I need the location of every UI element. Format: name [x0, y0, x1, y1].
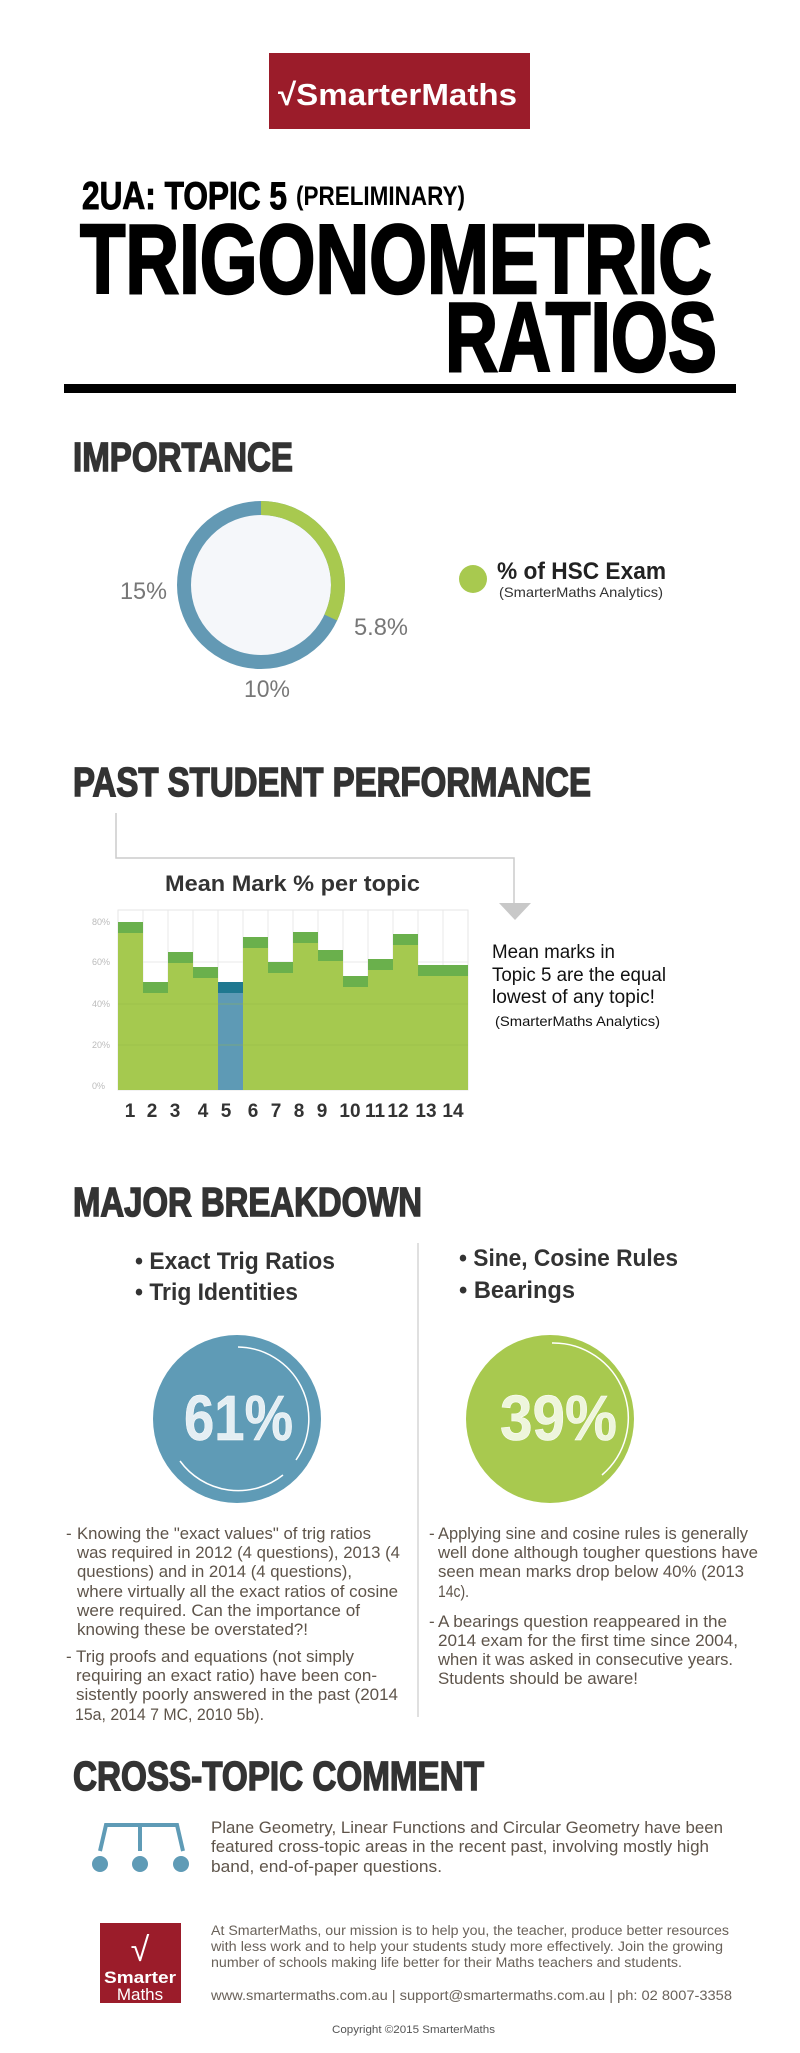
circle: 61%	[153, 1335, 321, 1503]
subtitle: topic: 2UA: TOPIC 5	[82, 175, 287, 218]
text block: right breakdown: A bearings question reappeared in the	[438, 1612, 727, 1631]
bar chart: 8	[294, 1101, 304, 1122]
legend: % of HSC Exam	[497, 558, 666, 585]
bullets: left: • Trig Identities	[135, 1279, 298, 1306]
bar chart: 9	[317, 1101, 327, 1122]
footer logo	[100, 1923, 181, 2004]
bar chart: 5	[221, 1101, 232, 1122]
bar chart: 12	[387, 1101, 409, 1122]
footer text	[210, 1923, 732, 2003]
bar chart: 7	[271, 1101, 281, 1122]
copyright: Copyright ©2015 SmarterMaths	[332, 2024, 496, 2036]
donut chart: 10%	[244, 676, 290, 703]
icon: hierarchy	[92, 1825, 189, 1872]
text block: right breakdown: well done although tougher questions have	[437, 1543, 758, 1562]
footer logo: √	[131, 1931, 150, 1969]
footer text: with less work and to help your students study more effectively. Join the growing	[210, 1939, 723, 1954]
heading: past student performance: PAST STUDENT PERFORMANCE	[73, 759, 591, 805]
chart title: Mean Mark % per topic	[165, 871, 420, 896]
text block: right breakdown: -	[429, 1612, 435, 1631]
bar chart: 10	[339, 1101, 361, 1122]
logo	[269, 53, 530, 129]
footer text: www.smartermaths.com.au | support@smartermaths.com.au | ph: 02 8007-3358	[210, 1988, 732, 2003]
chart callout text: Topic 5 are the equal	[492, 965, 666, 986]
text block: right breakdown: Students should be aware!	[438, 1669, 638, 1688]
chart callout text: lowest of any topic!	[492, 987, 655, 1008]
text block: cross-topic: featured cross-topic areas in the recent past, involving mostly high	[211, 1837, 709, 1856]
donut chart	[120, 508, 408, 703]
text block: right breakdown: seen mean marks drop below 40% (2013	[438, 1562, 744, 1581]
text block: cross-topic	[211, 1818, 723, 1876]
text block: right breakdown: 2014 exam for the first time since 2004,	[438, 1631, 738, 1650]
bar chart: 14	[442, 1101, 464, 1122]
text block: right breakdown	[429, 1524, 758, 1688]
bar chart: 2	[147, 1101, 157, 1122]
footer text: At SmarterMaths, our mission is to help you, the teacher, produce better resources	[211, 1923, 729, 1938]
donut chart: 15%	[120, 578, 167, 605]
heading: cross-topic comment: CROSS-TOPIC COMMENT	[73, 1753, 484, 1799]
title: RATIOS	[445, 282, 717, 392]
text block: right breakdown: when it was asked in consecutive years.	[437, 1650, 733, 1669]
bullets: right: • Bearings	[459, 1277, 575, 1304]
bullets: left: • Exact Trig Ratios	[135, 1248, 335, 1275]
legend	[459, 558, 666, 600]
text block: right breakdown: Applying sine and cosine rules is generally	[438, 1524, 748, 1543]
heading: major breakdown: MAJOR BREAKDOWN	[73, 1179, 422, 1225]
text block: left breakdown: -	[66, 1524, 72, 1543]
text block: left breakdown: -	[66, 1647, 72, 1666]
footer text: number of schools making life better for their Maths teachers and students.	[211, 1955, 682, 1970]
subtitle: topic: (PRELIMINARY)	[296, 181, 465, 211]
text block: left breakdown: Knowing the "exact values" of trig ratios	[77, 1524, 371, 1543]
bar chart: 1	[125, 1101, 136, 1122]
bar chart: 6	[248, 1101, 258, 1122]
text block: left breakdown	[66, 1524, 400, 1724]
circle: 39%	[466, 1335, 634, 1503]
donut chart: 5.8%	[354, 614, 408, 641]
bar chart: 3	[170, 1101, 180, 1122]
text block: right breakdown: 14c).	[438, 1582, 469, 1601]
subtitle: topic	[82, 175, 465, 218]
chart callout text	[492, 942, 666, 1029]
text block: left breakdown: Trig proofs and equations (not simply	[76, 1647, 354, 1666]
text block: cross-topic: Plane Geometry, Linear Functions and Circular Geometry have been	[211, 1818, 723, 1837]
text block: left breakdown: requiring an exact ratio) have been con-	[76, 1666, 377, 1685]
logo: √SmarterMaths	[278, 77, 517, 112]
bar chart: 80%	[92, 917, 110, 927]
text block: left breakdown: sistently poorly answered in the past (2014	[76, 1685, 398, 1704]
text block: left breakdown: 15a, 2014 7 MC, 2010 5b).	[75, 1705, 264, 1724]
circle: 39%: 39%	[500, 1382, 617, 1454]
bar chart: 0%	[92, 1081, 105, 1091]
bullets: right	[459, 1245, 678, 1304]
footer logo: Maths	[117, 1985, 163, 2004]
text block: left breakdown: where virtually all the exact ratios of cosine	[76, 1582, 398, 1601]
bar chart: 13	[415, 1101, 437, 1122]
bar chart	[92, 910, 468, 1122]
bar chart: 4	[198, 1101, 209, 1122]
legend: (SmarterMaths Analytics)	[499, 584, 663, 600]
bar chart: 20%	[92, 1040, 110, 1050]
chart callout text: (SmarterMaths Analytics)	[495, 1013, 660, 1029]
text block: left breakdown: knowing these be overstated?!	[77, 1620, 308, 1639]
chart callout text: Mean marks in	[492, 942, 615, 963]
heading: importance: IMPORTANCE	[73, 434, 293, 480]
text block: right breakdown: -	[429, 1524, 435, 1543]
bar chart: 60%	[92, 957, 110, 967]
bar chart: 40%	[92, 999, 110, 1009]
text block: left breakdown: were required. Can the importance of	[76, 1601, 360, 1620]
text block: cross-topic: band, end-of-paper questions.	[211, 1857, 442, 1876]
text block: left breakdown: was required in 2012 (4 questions), 2013 (4	[76, 1543, 400, 1562]
circle: 61%: 61%	[184, 1382, 293, 1454]
arrow: connector	[116, 813, 531, 920]
footer logo: Smarter	[104, 1968, 176, 1987]
bullets: right: • Sine, Cosine Rules	[459, 1245, 678, 1272]
bar chart: 11	[365, 1101, 385, 1122]
text block: left breakdown: questions) and in 2014 (4 questions),	[77, 1562, 352, 1581]
title	[80, 204, 717, 392]
bullets: left	[135, 1248, 335, 1306]
